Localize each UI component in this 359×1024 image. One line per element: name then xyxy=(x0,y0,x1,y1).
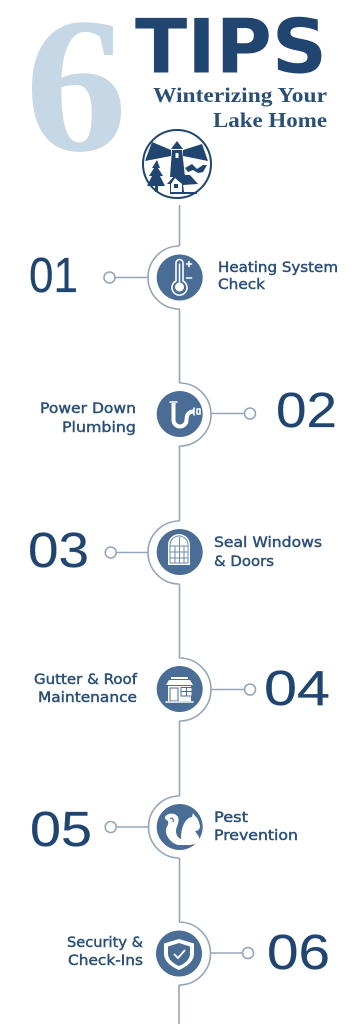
label xyxy=(67,935,143,969)
icon: pipe xyxy=(157,391,203,437)
title: TIPS: TIPS xyxy=(135,2,327,90)
subtitle xyxy=(153,83,327,132)
label: Security & xyxy=(67,935,143,951)
connector 03 xyxy=(105,521,180,584)
connector 01 xyxy=(104,246,180,309)
icon: thermometer xyxy=(157,254,203,300)
icon: window xyxy=(157,529,203,575)
icon: house xyxy=(157,666,203,712)
step 02: power down plumbing xyxy=(40,383,337,446)
step 05: pest prevention xyxy=(30,796,298,858)
step 04: gutter and roof maintenance xyxy=(34,658,330,721)
step 06: security and check-ins xyxy=(67,922,330,985)
connector 04 xyxy=(180,658,256,721)
subtitle: Winterizing Your xyxy=(153,83,327,107)
label: Prevention xyxy=(214,828,298,844)
number 05: 05 xyxy=(30,803,92,857)
label xyxy=(218,260,338,293)
logo: lighthouse badge xyxy=(143,130,211,198)
number 03: 03 xyxy=(28,524,89,578)
timeline spine xyxy=(178,205,180,1024)
label: Heating System xyxy=(218,260,338,276)
label: Plumbing xyxy=(62,420,136,436)
label: Check xyxy=(218,277,266,293)
connector 06 xyxy=(179,922,254,985)
label: Pest xyxy=(214,810,248,826)
step 03: seal windows and doors xyxy=(28,521,322,584)
icon: squirrel xyxy=(157,804,203,850)
number 06: 06 xyxy=(267,926,330,980)
step 01: heating system check xyxy=(29,246,338,309)
number 01: 01 xyxy=(29,249,78,303)
label xyxy=(40,401,136,436)
subtitle: Lake Home xyxy=(213,108,327,132)
label: Gutter & Roof xyxy=(34,672,138,688)
label: Seal Windows xyxy=(214,535,322,551)
icon: shield xyxy=(156,930,202,976)
label: & Doors xyxy=(214,554,274,570)
number 02: 02 xyxy=(276,384,337,438)
connector 02 xyxy=(180,383,256,446)
label xyxy=(214,810,298,844)
label: Maintenance xyxy=(38,690,137,706)
label: Power Down xyxy=(40,401,136,417)
label: Check-Ins xyxy=(68,953,143,969)
connector 05 xyxy=(105,796,180,858)
number 04: 04 xyxy=(264,662,330,716)
label xyxy=(214,535,322,570)
label xyxy=(34,672,138,706)
